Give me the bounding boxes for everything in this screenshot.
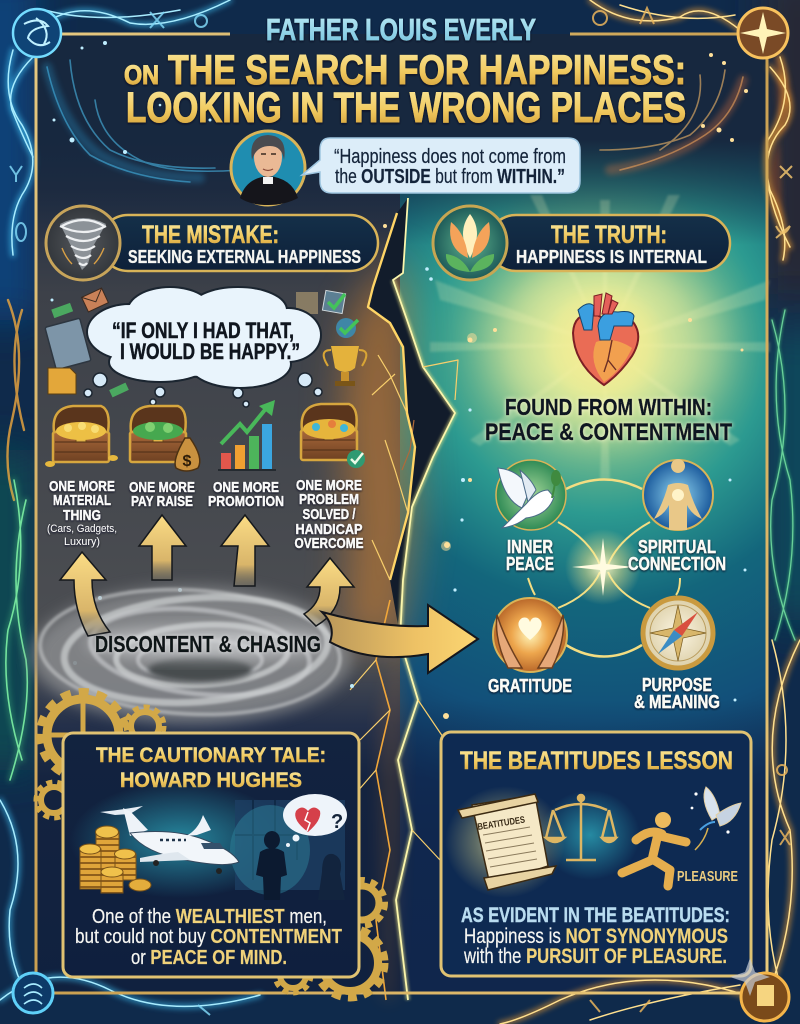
label: problem solved: SOLVED / xyxy=(302,506,356,523)
illustration glow xyxy=(540,790,640,880)
label: promotion: PROMOTION xyxy=(208,493,284,510)
label: inner peace xyxy=(506,537,554,574)
panel title: THE BEATITUDES LESSON xyxy=(460,747,733,775)
item labels xyxy=(47,477,364,552)
panel body text: with the PURSUIT OF PLEASURE. xyxy=(463,945,727,968)
big arrow to truth xyxy=(322,605,478,673)
subheading: seeking external happiness: SEEKING EXTERNAL HAPPINESS xyxy=(128,247,361,267)
gears xyxy=(36,692,385,998)
icon: jewel chest with check xyxy=(301,404,365,468)
corner sparkle mark xyxy=(730,958,770,996)
label: promotion xyxy=(208,479,284,510)
icon: spiritual figure xyxy=(643,459,713,530)
label: promotion: ONE MORE xyxy=(213,479,279,496)
connecting rings and star xyxy=(528,480,680,656)
panel body text: but could not buy CONTENTMENT xyxy=(75,926,342,948)
panel title: THE CAUTIONARY TALE: xyxy=(96,744,326,767)
portrait of Father Louis Everly xyxy=(231,131,305,205)
warm glow beside crack (decor) xyxy=(340,250,418,640)
icon: gold treasure chest xyxy=(45,406,118,467)
label: problem solved: ONE MORE xyxy=(296,477,362,494)
label: material thing: MATERIAL xyxy=(53,492,111,509)
label: discontent and chasing: DISCONTENT & CHASING xyxy=(95,631,321,657)
label: purpose and meaning: PURPOSE xyxy=(642,675,712,695)
icon: tornado xyxy=(46,206,120,280)
label: inner peace: PEACE xyxy=(506,554,554,574)
orange energy wisps, right border xyxy=(500,0,800,1024)
floating worldly items xyxy=(45,288,366,397)
cloud text xyxy=(112,318,300,364)
discontent swirl xyxy=(32,582,352,723)
title line: on the search for happiness: ON xyxy=(124,60,159,90)
header: the truth xyxy=(433,206,730,280)
icon: private jet xyxy=(100,806,239,874)
label: material thing: THING xyxy=(63,507,101,524)
label: problem solved: HANDICAP xyxy=(296,521,362,538)
icon: trophy xyxy=(324,346,366,386)
title line: Father Louis Everly: FATHER LOUIS EVERLY xyxy=(266,12,536,47)
thought cloud xyxy=(84,288,322,407)
heading: found from within: FOUND FROM WITHIN: xyxy=(505,394,712,420)
icon: gratitude hands xyxy=(493,598,567,672)
icon: growth bar chart xyxy=(218,400,276,470)
panel body text: AS EVIDENT IN THE BEATITUDES: xyxy=(461,904,730,927)
icon: heart xyxy=(543,283,667,407)
panel body text xyxy=(461,904,730,968)
heading text: the mistake: THE MISTAKE: xyxy=(142,221,279,249)
icon: man silhouette xyxy=(256,831,287,900)
icon: running figure xyxy=(622,812,686,886)
panel: beatitudes lesson xyxy=(441,732,751,976)
panel body text xyxy=(75,906,342,969)
heading text: the truth: THE TRUTH: xyxy=(551,221,667,249)
interior orange fan (decor) xyxy=(600,70,743,170)
cloud text: “IF ONLY I HAD THAT, xyxy=(112,318,294,343)
central lightning divide xyxy=(350,198,458,1000)
panel body text: One of the WEALTHIEST men, xyxy=(92,906,327,928)
panel: cautionary tale xyxy=(63,733,359,977)
label: pay raise: PAY RAISE xyxy=(131,493,193,510)
quote bubble: the OUTSIDE but from WITHIN.” xyxy=(335,166,565,188)
cloud text: I WOULD BE HAPPY.” xyxy=(120,339,300,364)
header: the mistake xyxy=(46,206,378,280)
label: pay raise xyxy=(129,479,195,510)
label: material thing: (Cars, Gadgets, xyxy=(47,523,117,535)
panel body text: or PEACE OF MIND. xyxy=(131,947,287,969)
label: purpose and meaning: & MEANING xyxy=(634,692,720,712)
blue energy wisps, left border xyxy=(0,0,260,1006)
label: spiritual connection xyxy=(628,537,726,574)
icon: balance scales xyxy=(546,795,616,860)
sparkles xyxy=(50,41,748,719)
quote bubble xyxy=(302,138,580,193)
light rays around heart (decor) xyxy=(430,195,770,480)
icon: central star xyxy=(565,529,641,605)
label: material thing xyxy=(47,478,117,548)
icon: butterfly xyxy=(691,787,741,850)
heading: found from within xyxy=(485,394,732,446)
label: problem solved: OVERCOME xyxy=(294,535,364,552)
label: material thing: Luxury) xyxy=(64,536,100,548)
title xyxy=(124,12,686,132)
label: spiritual connection: CONNECTION xyxy=(628,554,726,574)
label: problem solved: PROBLEM xyxy=(299,491,359,508)
icon: compass xyxy=(643,598,713,668)
icon: glowing scroll xyxy=(445,786,565,898)
label: inner peace: INNER xyxy=(507,537,553,557)
icon: gold coin stacks xyxy=(80,826,151,893)
panel title xyxy=(96,744,326,792)
label: material thing: ONE MORE xyxy=(49,478,115,495)
thought bubble: broken heart and question xyxy=(283,794,347,847)
interior blue fan (decor) xyxy=(47,60,240,182)
icon: glowing flower xyxy=(433,206,507,280)
quote bubble: “Happiness does not come from xyxy=(334,146,566,168)
upward arrows xyxy=(60,515,354,636)
right column labels xyxy=(488,537,726,712)
subheading: happiness is internal: HAPPINESS IS INTERNAL xyxy=(516,247,707,267)
label: problem solved xyxy=(294,477,364,552)
icon: chest of cash and money bag: $ xyxy=(183,453,192,470)
panel body text: Happiness is NOT SYNONYMOUS xyxy=(464,925,728,948)
heading: found from within: PEACE & CONTENTMENT xyxy=(485,419,732,446)
label: pleasure: PLEASURE xyxy=(677,869,738,885)
illustration backdrop xyxy=(70,782,290,898)
label: pay raise: ONE MORE xyxy=(129,479,195,496)
title line: on the search for happiness: THE SEARCH FOR HAPPINESS: xyxy=(168,46,686,93)
thought bubble: broken heart and question: ? xyxy=(331,811,343,833)
window and seated shadow xyxy=(230,800,345,900)
label: gratitude: GRATITUDE xyxy=(488,676,572,696)
label: purpose and meaning xyxy=(634,675,720,712)
icon: dove, inner peace xyxy=(496,460,566,530)
panel title: HOWARD HUGHES xyxy=(120,769,302,792)
scroll label: BEATITUDES xyxy=(477,815,526,833)
label: spiritual connection: SPIRITUAL xyxy=(638,537,716,557)
icon: chest of cash and money bag xyxy=(130,406,200,471)
